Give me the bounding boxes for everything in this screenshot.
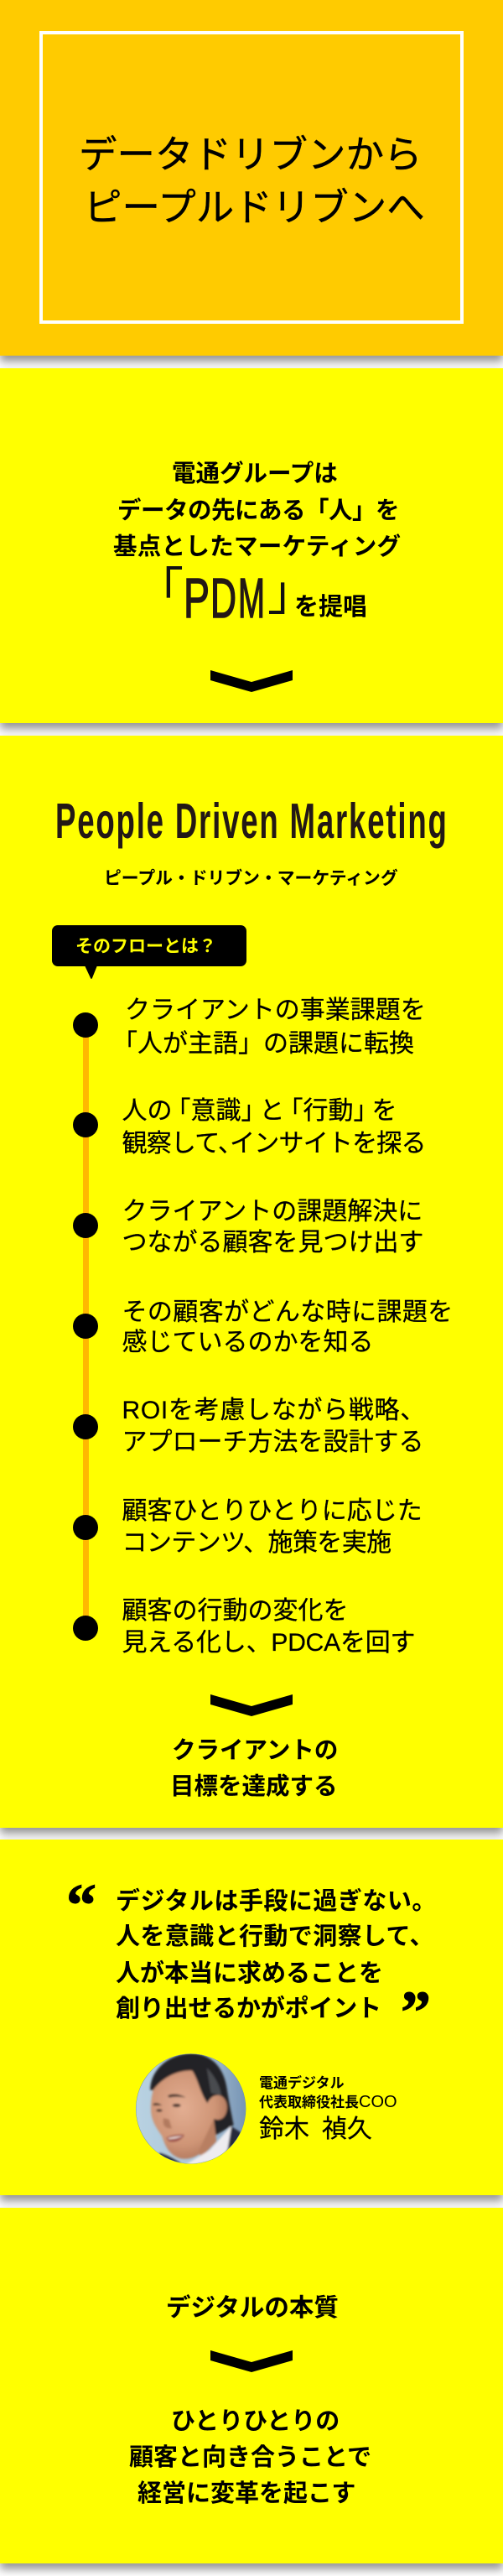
panel: quote (0, 1840, 503, 2195)
title text: ピープルドリブンへ (84, 186, 425, 229)
subheading: ピープル・ドリブン・マーケティング (104, 869, 398, 888)
step 2: 人の「意識」と「行動」を (122, 1097, 397, 1125)
panel: title (0, 0, 503, 356)
conclusion text (129, 2408, 371, 2507)
speaker name and title: 鈴木 禎久 (259, 2115, 372, 2143)
conclusion text: 経営に変革を起こす (137, 2480, 355, 2507)
white frame (39, 31, 464, 324)
portrait photo (136, 2053, 246, 2164)
step 5: アプローチ方法を設計する (122, 1429, 424, 1456)
step 6: 顧客ひとりひとりに応じた (122, 1497, 423, 1525)
step 1 (73, 997, 426, 1058)
speaker name and title: 代表取締役社長COO (259, 2093, 397, 2111)
quote text: 人が本当に求めることを (116, 1960, 383, 1987)
step 4: 感じているのかを知る (122, 1329, 374, 1356)
step 4: その顧客がどんな時に課題を (122, 1298, 454, 1326)
arrow: chevron (210, 2350, 293, 2372)
PDM proposal line: を提唱 (294, 587, 367, 622)
step 3: クライアントの課題解決に (122, 1198, 423, 1226)
goal text: クライアントの (172, 1737, 338, 1764)
goal text (170, 1737, 338, 1800)
conclusion text: ひとりひとりの (171, 2408, 340, 2435)
intro text: 電通グループは (172, 461, 338, 487)
PDM proposal line: M (238, 567, 265, 630)
quote text: 創り出せるかがポイント (116, 1996, 381, 2022)
step 6: コンテンツ、施策を実施 (122, 1529, 391, 1557)
intro text (113, 461, 401, 560)
title text (79, 133, 425, 229)
step 1: クライアントの事業課題を (125, 997, 426, 1024)
quote text: デジタルは手段に過ぎない。 (116, 1888, 437, 1915)
panel: essence of digital (0, 2208, 503, 2563)
goal text: 目標を達成する (170, 1773, 338, 1800)
step 7 (73, 1597, 415, 1657)
intro text: 基点としたマーケティング (113, 533, 401, 560)
title text: データドリブンから (79, 133, 423, 176)
timeline line (83, 1025, 89, 1628)
heading: デジタルの本質 (166, 2294, 339, 2322)
arrow: chevron (210, 1694, 293, 1716)
quote text (116, 1887, 437, 2022)
PDM proposal line: P (184, 567, 210, 630)
step 5 (73, 1397, 426, 1456)
step 3 (73, 1198, 424, 1257)
panel: People Driven Marketing flow (0, 736, 503, 1828)
step 6 (73, 1497, 423, 1557)
speaker name and title: 電通デジタル (259, 2075, 345, 2091)
conclusion text: 顧客と向き合うことで (129, 2444, 371, 2471)
step 2: 観察して、インサイトを探る (122, 1130, 426, 1158)
intro text: データの先にある「人」を (117, 497, 399, 524)
quote text: 人を意識と行動で洞察して、 (116, 1923, 434, 1950)
heading: People Driven Marketing (55, 794, 447, 849)
step 2 (73, 1097, 426, 1158)
panel: PDM introduction (0, 368, 503, 723)
step 7: 見える化し、PDCAを回す (122, 1629, 415, 1657)
callout: そのフローとは？ (75, 937, 216, 956)
PDM proposal line: 「 (135, 551, 184, 622)
speaker name and title (259, 2075, 397, 2143)
arrow: chevron (210, 670, 293, 692)
step 5: ROIを考慮しながら戦略、 (122, 1397, 426, 1424)
callout (52, 925, 246, 979)
step 4 (73, 1298, 454, 1356)
step 1: 「人が主語」の課題に転換 (112, 1030, 414, 1058)
PDM proposal line: 」 (267, 554, 316, 624)
icon: opening quote mark: “ (66, 1871, 96, 1939)
PDM proposal line (135, 551, 367, 630)
PDM proposal line: D (210, 567, 236, 630)
step 7: 顧客の行動の変化を (122, 1597, 349, 1625)
step 3: つながる顧客を見つけ出す (122, 1229, 424, 1257)
